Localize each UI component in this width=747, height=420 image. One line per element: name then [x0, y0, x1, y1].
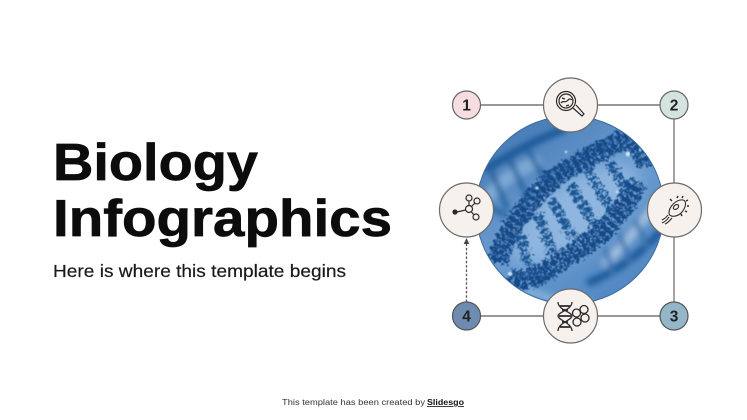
icon: petri dish under magnifier: [544, 78, 598, 132]
node 4: 4: [462, 308, 471, 326]
title: Infographics: [53, 190, 392, 248]
footer credit: This template has been created by: [282, 398, 425, 407]
icon: molecule network: [440, 183, 494, 237]
node 3: 3: [670, 308, 679, 326]
blurred background helices: [485, 130, 660, 304]
light glow behind helix: [508, 156, 645, 272]
icon: DNA and molecules: [544, 289, 598, 343]
footer credit: Slidesgo: [427, 398, 464, 407]
photo ring: [476, 116, 664, 304]
icon: bacterium: [648, 183, 702, 237]
node 2: 2: [670, 98, 678, 114]
node 3: [660, 302, 688, 330]
title: Biology: [53, 134, 258, 192]
footer credit: [282, 398, 464, 407]
subtitle: Here is where this template begins: [53, 261, 346, 281]
lower strand: [508, 182, 638, 280]
connector lines: [466, 105, 674, 316]
helix rungs: [520, 163, 628, 265]
arrow: step 4 to molecule: [464, 238, 469, 244]
node 2: [660, 91, 688, 119]
node 1: 1: [462, 98, 471, 114]
title: [53, 134, 392, 248]
node 4: [452, 302, 480, 330]
photo: DNA helix in circle: [476, 116, 664, 304]
main helix: [498, 140, 646, 280]
node 1: [452, 91, 480, 119]
highlights: [508, 149, 641, 276]
upper strand: [498, 140, 646, 262]
